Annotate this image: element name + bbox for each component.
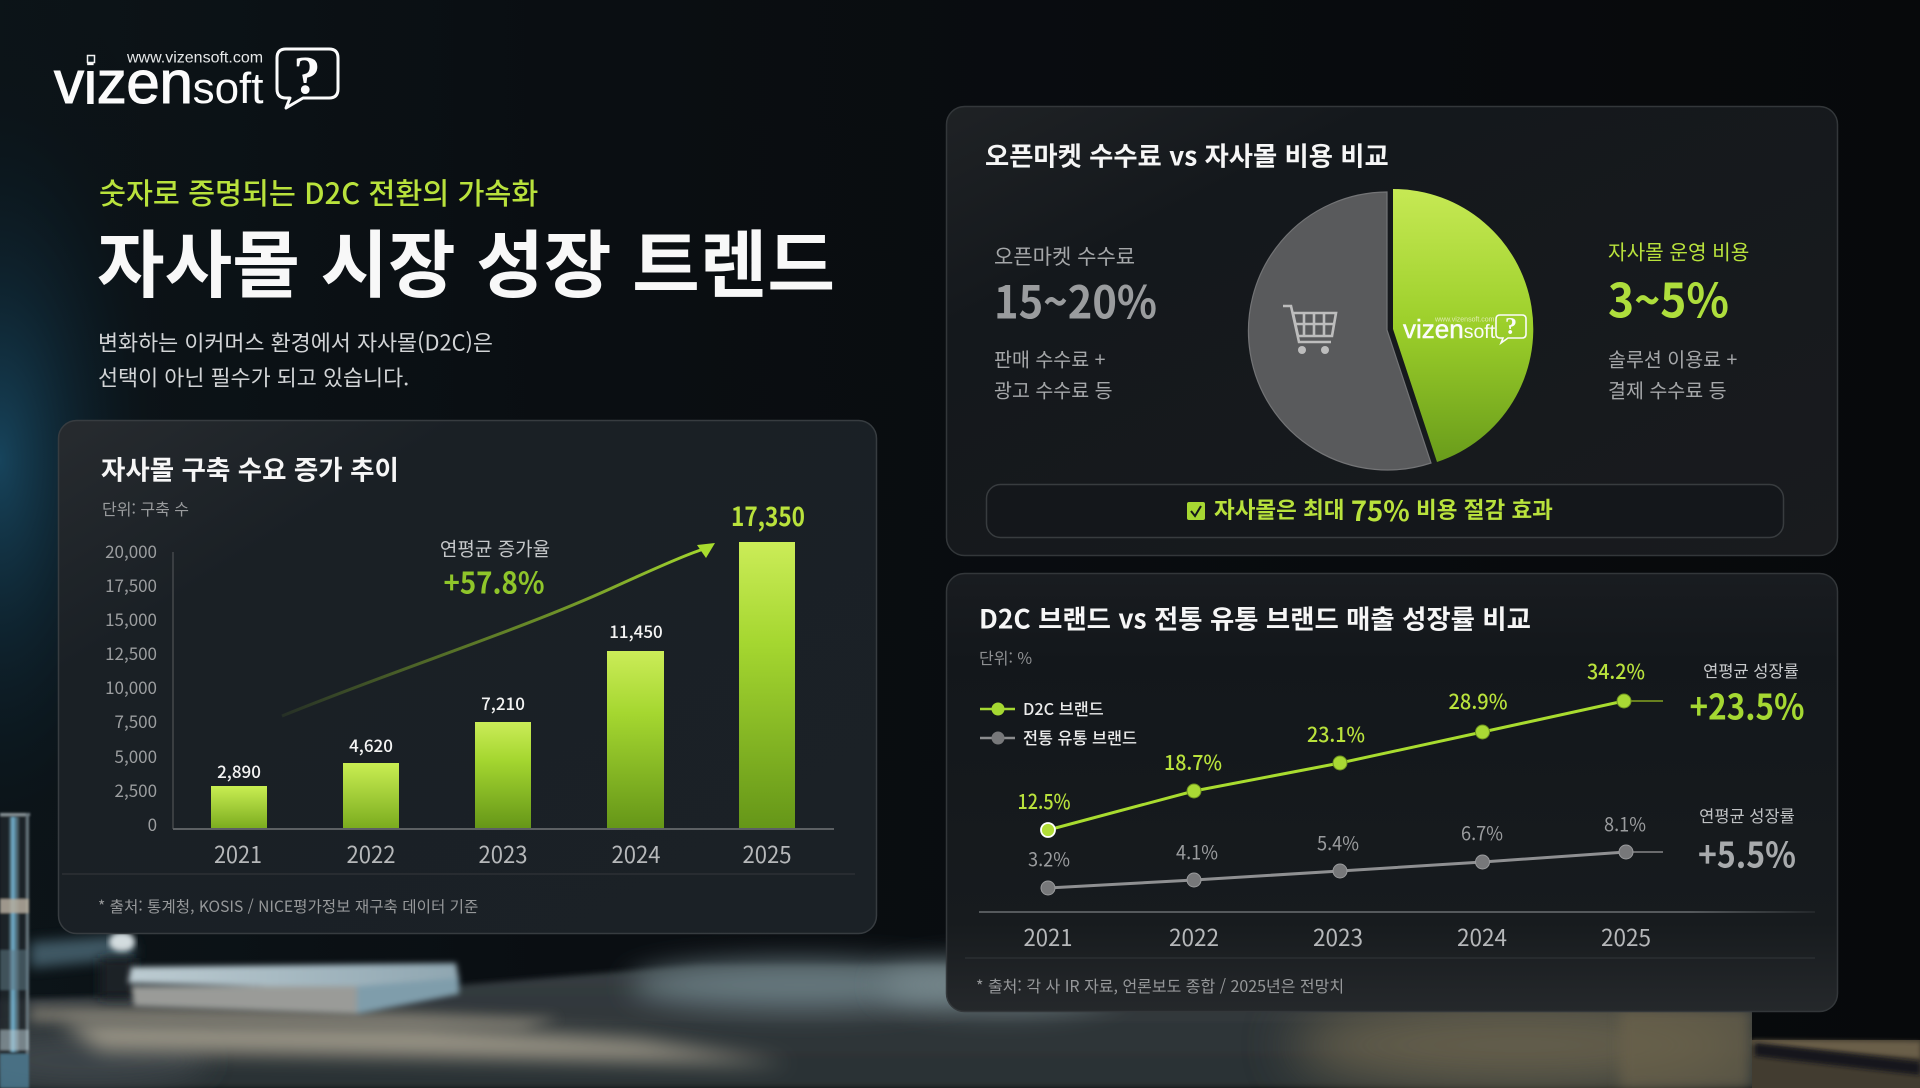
x axis years: 2021 bbox=[1024, 919, 1072, 953]
arrow: growth trend bbox=[282, 543, 715, 716]
heading block bbox=[97, 171, 835, 392]
right stat: own mall bbox=[1608, 236, 1749, 404]
stat: D2C annual growth: +23.5% bbox=[1690, 679, 1804, 730]
y axis labels: 0 bbox=[148, 811, 157, 836]
logo on pie: www.vizensoft.com bbox=[1434, 316, 1495, 324]
main title: 자사몰 시장 성장 트렌드 bbox=[97, 207, 835, 313]
y axis labels: 2,500 bbox=[115, 777, 157, 802]
legend bbox=[980, 696, 1137, 749]
y axis labels: 5,000 bbox=[115, 743, 157, 768]
left stat: open market: 광고 수수료 등 bbox=[994, 374, 1113, 404]
y axis labels: 10,000 bbox=[105, 674, 157, 699]
D2C value labels: 34.2% bbox=[1587, 655, 1645, 685]
traditional value labels bbox=[1028, 809, 1646, 873]
icon: shopping cart bbox=[1283, 306, 1336, 354]
description: 변화하는 이커머스 환경에서 자사몰(D2C)은 bbox=[98, 326, 493, 358]
stat: traditional annual growth bbox=[1698, 803, 1796, 878]
x axis years bbox=[1024, 919, 1651, 953]
x axis years: 2022 bbox=[1169, 919, 1219, 953]
wordmark: vizensoft bbox=[54, 49, 264, 116]
bar value labels: 7,210 bbox=[481, 690, 525, 715]
D2C value labels bbox=[1018, 655, 1645, 815]
y axis labels: 12,500 bbox=[105, 640, 157, 665]
legend: D2C 브랜드 bbox=[1023, 696, 1104, 720]
x axis years: 2022 bbox=[346, 836, 396, 870]
right stat: own mall: 3~5% bbox=[1608, 262, 1729, 331]
pie chart bbox=[1248, 189, 1533, 470]
right stat: own mall: 솔루션 이용료 + bbox=[1608, 344, 1738, 372]
D2C value labels: 18.7% bbox=[1164, 746, 1222, 776]
source note: * 출처: 통계청, KOSIS / NICE평가정보 재구축 데이터 기준 bbox=[98, 895, 478, 917]
panel: 자사몰 구축 수요 증가 추이 bbox=[58, 420, 876, 934]
traditional value labels: 6.7% bbox=[1461, 818, 1503, 847]
D2C value labels: 28.9% bbox=[1448, 685, 1508, 715]
unit label: 단위: % bbox=[979, 645, 1032, 669]
bar value labels: 2,890 bbox=[217, 758, 261, 783]
x axis years: 2024 bbox=[612, 836, 661, 870]
y axis labels: 20,000 bbox=[105, 538, 157, 563]
left stat: open market: 오픈마켓 수수료 bbox=[994, 241, 1135, 271]
x axis years: 2025 bbox=[742, 836, 792, 870]
bar value labels: 11,450 bbox=[609, 618, 663, 643]
traditional value labels: 5.4% bbox=[1317, 828, 1359, 857]
panel: D2C 브랜드 vs 전통 유통 브랜드 매출 성장률 비교 bbox=[946, 574, 1838, 1012]
panel heading: D2C 브랜드 vs 전통 유통 브랜드 매출 성장률 비교 bbox=[979, 598, 1531, 636]
callout: annual growth bbox=[440, 534, 550, 602]
stat: D2C annual growth bbox=[1690, 658, 1804, 730]
panel: 오픈마켓 수수료 vs 자사몰 비용 비교 bbox=[946, 106, 1838, 556]
stat: traditional annual growth: +5.5% bbox=[1698, 827, 1796, 878]
bar value labels bbox=[217, 497, 805, 783]
callout: annual growth: +57.8% bbox=[444, 558, 544, 602]
eyebrow subtitle: 숫자로 증명되는 D2C 전환의 가속화 bbox=[99, 171, 538, 213]
description bbox=[98, 326, 493, 392]
traditional value labels: 3.2% bbox=[1028, 844, 1070, 873]
icon: question speech bubble bbox=[277, 45, 338, 108]
bar value labels: 17,350 bbox=[731, 497, 805, 534]
callout: 75% savings bbox=[986, 484, 1784, 538]
y axis labels: 17,500 bbox=[105, 572, 157, 597]
description: 선택이 아닌 필수가 되고 있습니다. bbox=[98, 362, 409, 392]
panel heading: 오픈마켓 수수료 vs 자사몰 비용 비교 bbox=[985, 134, 1389, 174]
website url: www.vizensoft.com bbox=[126, 50, 263, 66]
panel heading: 자사몰 구축 수요 증가 추이 bbox=[101, 448, 399, 488]
left stat: open market: 판매 수수료 + bbox=[994, 344, 1106, 372]
left stat: open market bbox=[994, 241, 1157, 404]
left stat: open market: 15~20% bbox=[994, 266, 1157, 331]
x axis years: 2023 bbox=[1313, 919, 1363, 953]
callout: annual growth: 연평균 증가율 bbox=[440, 534, 550, 562]
stat: D2C annual growth: 연평균 성장률 bbox=[1703, 658, 1799, 682]
stat: traditional annual growth: 연평균 성장률 bbox=[1699, 803, 1795, 827]
x axis years: 2021 bbox=[214, 836, 262, 870]
traditional value labels: 4.1% bbox=[1176, 837, 1218, 866]
icon: check box bbox=[1187, 502, 1205, 520]
right stat: own mall: 자사몰 운영 비용 bbox=[1608, 236, 1749, 266]
y axis labels: 15,000 bbox=[105, 606, 157, 631]
D2C value labels: 12.5% bbox=[1018, 785, 1070, 815]
icon: question speech bubble: ? bbox=[294, 45, 320, 105]
legend: 전통 유통 브랜드 bbox=[1023, 725, 1137, 749]
traditional value labels: 8.1% bbox=[1604, 809, 1646, 838]
logo bbox=[54, 45, 338, 116]
callout: 75% savings: 자사몰은 최대 75% 비용 절감 효과 bbox=[1214, 489, 1553, 529]
bar chart bbox=[173, 542, 834, 829]
line chart: traditional brand bbox=[1041, 845, 1663, 895]
x axis years: 2023 bbox=[478, 836, 528, 870]
y axis labels bbox=[105, 538, 157, 836]
line chart: D2C brand bbox=[1041, 694, 1663, 837]
right stat: own mall: 결제 수수료 등 bbox=[1608, 374, 1727, 404]
D2C value labels: 23.1% bbox=[1307, 718, 1365, 748]
x axis years: 2024 bbox=[1457, 919, 1507, 953]
unit label: 단위: 구축 수 bbox=[102, 496, 189, 520]
source note: * 출처: 각 사 IR 자료, 언론보도 종합 / 2025년은 전망치 bbox=[976, 973, 1344, 997]
logo on pie: ? bbox=[1505, 314, 1517, 340]
y axis labels: 7,500 bbox=[115, 708, 157, 733]
x axis years: 2025 bbox=[1601, 919, 1651, 953]
x axis years bbox=[214, 836, 792, 870]
bar value labels: 4,620 bbox=[349, 732, 393, 757]
logo on pie: vizensoft bbox=[1403, 314, 1496, 344]
